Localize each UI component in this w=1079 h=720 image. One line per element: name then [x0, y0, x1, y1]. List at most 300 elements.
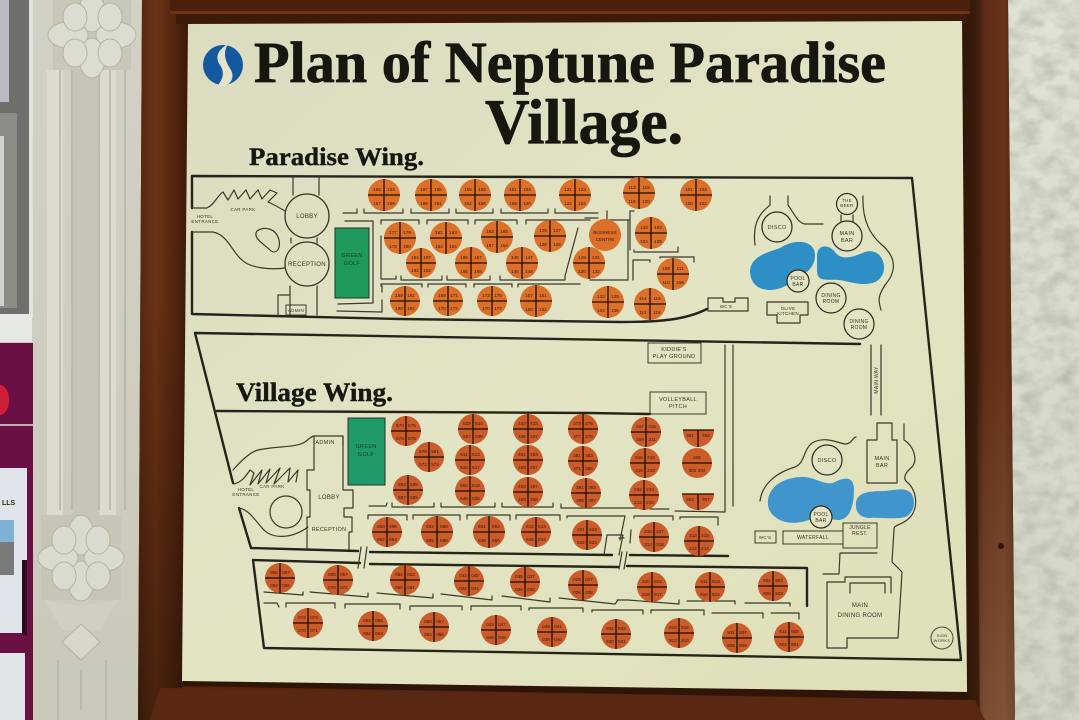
panel: Kiddie's playground and volleyball: [648, 343, 881, 512]
panel: Village Wing cottages: 052: [395, 572, 403, 577]
panel: Village Wing cottages: 309: [636, 437, 644, 442]
panel: Paradise Wing cottages: 112: [639, 310, 647, 315]
panel: Paradise green golf: GOLF: [344, 261, 360, 267]
paths around pools: [760, 424, 916, 638]
paths around pools: [754, 196, 893, 310]
panel: Village Wing cottages: 589: [410, 495, 418, 500]
panel: Village Wing cottages: 393: [588, 485, 596, 490]
panel: Village Wing cottages: 922: [654, 579, 662, 584]
panel: Paradise Wing cottages: 187: [423, 255, 431, 260]
main bar: MAIN: [875, 456, 889, 462]
main dining room: DINING ROOM: [838, 613, 882, 619]
panel: Village Wing cottages: 621: [577, 527, 585, 532]
panel: Village Wing cottages: 572: [419, 462, 427, 467]
panel: Paradise Wing cottages: 103: [699, 187, 707, 192]
panel: Paradise Wing cottages: 105: [654, 239, 662, 244]
hotel entrance label: ENTRANCE: [232, 492, 260, 497]
the beer: THE: [842, 198, 852, 203]
panel: Paradise Wing cottages: 151: [464, 201, 472, 206]
panel: Village Wing cottages: 375: [585, 421, 593, 426]
panel: Paradise Wing cottages: 197: [420, 187, 428, 192]
panel: Village Wing cottages: 233: [646, 487, 654, 492]
panel: Village Wing cottages: 570: [396, 423, 404, 428]
panel: Village Wing cottages: 558: [472, 496, 480, 501]
panel: Village Wing cottages: 064: [375, 631, 383, 636]
panel: Paradise Wing cottages: 114: [639, 296, 647, 301]
panel: Village Wing cottages: [265, 414, 804, 653]
panel: Village Wing cottages: 043: [459, 573, 467, 578]
waterfall: [783, 531, 843, 544]
panel: Village Wing cottages: 612: [526, 524, 534, 529]
panel: Village Wing amenities: [755, 423, 953, 649]
panel: Village Wing cottages: 650: [492, 538, 500, 543]
panel: Village Wing cottages: 574: [431, 462, 439, 467]
panel: site boundary lines: [192, 176, 961, 660]
panel: Village Wing cottages: 371: [573, 466, 581, 471]
panel: Paradise Wing cottages: 161: [435, 230, 443, 235]
panel: Paradise Wing cottages: 151: [509, 187, 517, 192]
panel: Village Wing cottages: 051: [407, 585, 415, 590]
panel: Village Wing cottages: 649: [478, 538, 486, 543]
panel: Village Wing cottages: 920: [642, 579, 650, 584]
panel: Village Wing cottages: 316: [635, 468, 643, 473]
panel: Village Wing cottages: 903: [779, 642, 787, 647]
hotel entrance label: HOTEL: [197, 214, 213, 219]
panel: Village Wing cottages: 040: [554, 637, 562, 642]
panel: Paradise Wing cottages: 100: [685, 201, 693, 206]
disco: DISCO: [768, 225, 787, 231]
panel: Paradise Wing cottages: 180: [403, 244, 411, 249]
panel: Village Wing cottages: 509: [463, 421, 471, 426]
stamp: SIGN: [937, 633, 947, 638]
panel: Village Wing cottages: 054: [424, 632, 432, 637]
panel: Village Wing cottages: 902: [775, 591, 783, 596]
panel: magenta notice board bottom left: [0, 343, 38, 720]
dining room: [816, 283, 846, 313]
panel: Paradise Wing cottages: 164: [500, 243, 508, 248]
panel: Paradise Wing cottages: 146: [511, 269, 519, 274]
panel: Paradise Wing cottages: 110: [662, 280, 670, 285]
panel: Paradise Wing cottages: 101: [685, 187, 693, 192]
reception label: RECEPTION: [312, 527, 346, 533]
panel: Paradise Wing cottages: 122: [564, 201, 572, 206]
panel: Paradise Wing cottages: 120: [642, 199, 650, 204]
panel: Paradise Wing cottages: 198: [420, 201, 428, 206]
panel: Village Wing cottages: 050: [395, 585, 403, 590]
panel: Village Wing cottages: 057: [282, 570, 290, 575]
panel: Paradise Wing cottages: 124: [578, 201, 586, 206]
heading: Paradise Wing: Paradise Wing.: [249, 144, 424, 171]
panel: Village Wing cottages: 508: [475, 434, 483, 439]
panel: Paradise Wing cottages: 155: [373, 187, 381, 192]
panel: Paradise Wing cottages: 167: [486, 243, 494, 248]
left pool: [750, 242, 815, 290]
panel: Village Wing cottages: 574: [396, 436, 404, 441]
panel: Village Wing cottages: 062: [363, 631, 371, 636]
panel: Village Wing cottages: 507: [463, 434, 471, 439]
panel: Paradise Wing cottages: 177: [389, 230, 397, 235]
heading: Village Wing: Village Wing.: [236, 378, 393, 407]
panel: Village Wing cottages: 025: [573, 577, 581, 582]
panel: Paradise Wing cottages: 133: [597, 294, 605, 299]
lobby: LOBBY: [296, 214, 318, 220]
panel: Village Wing cottages: 688: [440, 524, 448, 529]
title: Village.: [485, 86, 683, 157]
panel: Village Wing cottages: 213: [634, 500, 642, 505]
panel: Village Wing cottages: 587: [398, 495, 406, 500]
stamp: [931, 627, 953, 649]
panel: Paradise Wing cottages: 147: [525, 255, 533, 260]
icon: top rosette: [48, 0, 136, 78]
panel: grey notice board top left: [0, 0, 34, 342]
half-circle cottage top: 301: [686, 433, 694, 438]
panel: Village Wing cottages: 042: [459, 586, 467, 591]
panel: Paradise Wing cottages: 153: [387, 187, 395, 192]
panel: Village Wing cottages: 583: [398, 482, 406, 487]
panel: Village Wing cottages: 385: [585, 466, 593, 471]
panel: Village Wing cottages: 056: [282, 583, 290, 588]
panel: Village Wing cottages: 232: [634, 487, 642, 492]
panel: Paradise Wing cottages: 102: [699, 201, 707, 206]
panel: Village Wing cottages: 692: [377, 537, 385, 542]
panel: Village Wing cottages: 397: [588, 498, 596, 503]
olive kitchen: KITCHEN: [777, 311, 799, 316]
panel: Village Wing cottages: 213: [689, 533, 697, 538]
panel: Village Wing cottages: 445: [518, 434, 526, 439]
panel: Village Wing cottages: 624: [589, 540, 597, 545]
panel: Village Wing cottages: 038: [542, 637, 550, 642]
panel: Village Wing cottages: 046: [498, 635, 506, 640]
disco: [812, 445, 842, 475]
panel: Village Wing cottages: 036: [515, 587, 523, 592]
panel: Paradise Wing cottages: 128: [553, 242, 561, 247]
kiddies play ground: KIDDIE'S: [661, 347, 687, 353]
panel: Paradise Wing cottages: 172: [494, 306, 502, 311]
panel: Village Wing cottages: 932: [606, 626, 614, 631]
kiddies play ground: [648, 343, 701, 363]
panel: Paradise Wing cottages: 165: [460, 255, 468, 260]
panel: Village Wing cottages: 578: [408, 436, 416, 441]
panel: Village Wing cottages: 039: [542, 624, 550, 629]
panel: Village Wing cottages: 047: [498, 622, 506, 627]
panel: Paradise Wing cottages: 179: [403, 230, 411, 235]
panel: Paradise Wing cottages: 190: [395, 306, 403, 311]
panel: Village Wing cottages: 318: [656, 542, 664, 547]
panel: Village Wing cottages: 457: [530, 465, 538, 470]
panel: Village Wing cottages: 930: [606, 639, 614, 644]
panel: Village Wing cottages: 918: [642, 592, 650, 597]
panel: Paradise Wing entrance and lobby: [191, 176, 329, 315]
icon: lower rosette: [38, 515, 124, 720]
panel: Village Wing cottages: 696: [389, 524, 397, 529]
panel: Village Wing cottages: 907: [739, 630, 747, 635]
panel: Village green golf: [348, 418, 385, 485]
panel: Village green golf: GOLF: [358, 452, 374, 458]
panel: Paradise Wing cottages: 132: [592, 269, 600, 274]
main bar: MAIN: [840, 231, 854, 237]
main bar: [867, 423, 897, 483]
panel: Paradise green golf: GREEN: [341, 253, 363, 259]
panel: Village Wing cottages: 071: [310, 628, 318, 633]
panel: Paradise Wing cottages: 108: [676, 280, 684, 285]
panel: Paradise Wing cottages: 104: [640, 239, 648, 244]
panel: Paradise Wing cottages: 159: [387, 201, 395, 206]
panel: Village Wing cottages: 057: [436, 619, 444, 624]
panel: Village Wing cottages: 513: [472, 452, 480, 457]
reception: RECEPTION: [288, 262, 326, 268]
panel: Paradise Wing cottages: 184: [423, 268, 431, 273]
disco: [762, 212, 792, 242]
panel: sign board: [182, 21, 967, 692]
olive kitchen: OLIVE: [781, 306, 795, 311]
panel: Village Wing cottages: 317: [636, 424, 644, 429]
panel: Village Wing cottages: 212: [689, 546, 697, 551]
panel: Paradise Wing cottages: 118: [628, 199, 636, 204]
panel: Village Wing cottages: 585: [410, 482, 418, 487]
half-circle cottage bottom: 307: [702, 497, 710, 502]
panel: Paradise Wing cottages: 172: [450, 306, 458, 311]
panel: Village Wing cottages: 054: [270, 583, 278, 588]
panel: Paradise Wing cottages: 157: [373, 201, 381, 206]
right pool: [856, 489, 914, 518]
panel: Village Wing cottages: 451: [518, 452, 526, 457]
panel: Village Wing cottages: 623: [589, 527, 597, 532]
panel: Village Wing cottages: 911: [700, 579, 708, 584]
panel: Paradise Wing cottages: 145: [511, 255, 519, 260]
panel: Paradise Wing cottages: 103: [640, 225, 648, 230]
panel: Paradise Wing cottages: 166: [460, 269, 468, 274]
panel: Village Wing cottages: 319: [635, 455, 643, 460]
panel: Village Wing cottages: 437: [530, 434, 538, 439]
WCs: [708, 298, 748, 311]
panel: Paradise Wing cottages: 125: [539, 228, 547, 233]
panel: Village Wing cottages: 315: [648, 424, 656, 429]
panel: Paradise Wing amenities: [708, 194, 893, 339]
olive kitchen: [767, 302, 808, 323]
panel: Village Wing cottages: 215: [701, 533, 709, 538]
panel: Village Wing cottages: 055: [270, 570, 278, 575]
panel: Village Wing cottages: 214: [701, 546, 709, 551]
panel: Paradise Wing cottages: 140: [523, 201, 531, 206]
panel: Paradise Wing walkways: [337, 209, 694, 312]
panel: Village Wing cottages: 913: [681, 638, 689, 643]
panel: Village Wing cottages: 648: [526, 537, 534, 542]
panel: Village Wing cottages: 458: [530, 497, 538, 502]
panel: Paradise Wing cottages: 131: [592, 255, 600, 260]
volleyball pitch: VOLLEYBALL: [659, 397, 697, 403]
panel: Paradise Wing cottages: 159: [509, 201, 517, 206]
panel: Paradise Wing cottages: 127: [553, 228, 561, 233]
panel: Village Wing cottages: 455: [518, 465, 526, 470]
panel: Village Wing cottages: 457: [530, 484, 538, 489]
panel: Paradise Wing cottages: 167: [474, 255, 482, 260]
panel: Village green golf: GREEN: [355, 444, 377, 450]
panel: Paradise Wing cottages: 115: [653, 296, 661, 301]
panel: Village Wing cottages: 315: [644, 529, 652, 534]
panel: Village Wing cottages: 622: [577, 540, 585, 545]
panel: Paradise Wing cottages: 161: [434, 201, 442, 206]
main bar: [832, 221, 862, 251]
panel: Paradise Wing cottages: 155: [464, 187, 472, 192]
panel: Village Wing cottages: 311: [648, 437, 656, 442]
panel: Village Wing cottages: 302 304: [689, 468, 706, 473]
panel: Village Wing cottages: 933: [618, 626, 626, 631]
dining room: ROOM: [823, 299, 839, 305]
panel: Village Wing cottages: 065: [328, 572, 336, 577]
panel: Paradise Wing cottages: 156: [478, 201, 486, 206]
lobby label: LOBBY: [318, 495, 340, 501]
panel: Village Wing cottages: 518: [472, 483, 480, 488]
panel: Paradise Wing cottages: 111: [677, 266, 684, 271]
panel: Village Wing cottages: 694: [389, 537, 397, 542]
hotel entrance label: ENTRANCE: [191, 219, 219, 224]
panel: Village Wing cottages: 381: [573, 453, 581, 458]
panel: Village Wing cottages: 433: [530, 421, 538, 426]
half-circle cottage top: [683, 430, 714, 447]
volleyball pitch: PITCH: [669, 404, 687, 410]
panel: Paradise Wing cottages: 182: [411, 268, 419, 273]
panel: Paradise Wing cottages: 195: [478, 187, 486, 192]
main bar: BAR: [841, 238, 853, 244]
panel: Paradise Wing cottages: 191: [407, 293, 415, 298]
title: [254, 30, 886, 157]
panel: Village Wing cottages: 072: [340, 585, 348, 590]
panel: Village Wing cottages: 914: [669, 625, 677, 630]
panel: Village Wing cottages: 912: [669, 638, 677, 643]
main dining room: [823, 553, 898, 648]
panel: Village Wing cottages: 465: [518, 497, 526, 502]
panel: Village Wing cottages: 043: [486, 622, 494, 627]
panel: Village Wing cottages: 395: [576, 498, 584, 503]
panel: Village Wing cottages: 514: [475, 421, 483, 426]
half-circle cottage bottom: 304: [686, 497, 694, 502]
panel: Village Wing cottages: 072: [298, 615, 306, 620]
panel: Village Wing cottages: 053: [407, 572, 415, 577]
panel: Village Wing cottages: 218: [647, 455, 655, 460]
panel: Village Wing cottages: 453: [518, 484, 526, 489]
panel: Paradise Wing cottages: 170: [438, 306, 446, 311]
the beer: [836, 194, 858, 214]
hotel entrance label: HOTEL: [238, 487, 254, 492]
panel: Village Wing cottages: 056: [436, 632, 444, 637]
panel: Paradise Wing cottages: 181: [411, 255, 419, 260]
panel: Village Wing cottages: 038: [527, 587, 535, 592]
panel: Village Wing cottages: 912: [712, 592, 720, 597]
panel: Village Wing cottages: 379: [585, 434, 593, 439]
pool bar: [787, 270, 809, 292]
panel: Paradise Wing cottages: 152: [539, 307, 547, 312]
panel: Village Wing cottages: 028: [585, 590, 593, 595]
panel: Village Wing cottages: 517: [472, 465, 480, 470]
WCs: [755, 531, 776, 543]
panel: Village Wing cottages: 911: [779, 629, 787, 634]
WCs: WC'S: [759, 535, 771, 540]
panel: magenta notice board bottom left: LLS: [2, 500, 16, 507]
panel: Paradise green golf: [335, 228, 369, 298]
panel: Village Wing cottages: 534: [538, 537, 546, 542]
half-circle cottage top: 303: [702, 433, 710, 438]
panel: Village Wing cottages: 909: [739, 643, 747, 648]
panel: Village Wing cottages: 041: [471, 586, 479, 591]
panel: Paradise Wing cottages: 171: [450, 293, 458, 298]
right pool: [817, 246, 884, 284]
WCs: WC'S: [720, 304, 732, 309]
panel: Paradise Wing cottages: 136: [611, 308, 619, 313]
panel: Village Wing cottages: 685: [426, 538, 434, 543]
panel: Village Wing cottages: 917: [654, 592, 662, 597]
jungle rest: JUNGLE: [849, 525, 871, 531]
panel: Paradise Wing cottages: 116: [653, 310, 661, 315]
panel: Village Wing cottages: 690: [377, 524, 385, 529]
panel: Paradise Wing cottages: 134: [597, 308, 605, 313]
panel: Paradise Wing cottages: BUSINESS: [593, 230, 617, 235]
panel: Village Wing cottages: 901: [791, 642, 799, 647]
panel: Paradise Wing cottages: 150: [525, 307, 533, 312]
disco: DISCO: [818, 458, 837, 464]
panel: Village Wing cottages: 552: [460, 483, 468, 488]
dining room: DINING: [821, 293, 841, 299]
panel: Village Wing cottages: 027: [585, 577, 593, 582]
panel: Village Wing cottages: 545: [460, 496, 468, 501]
panel: Paradise Wing cottages: 170: [482, 306, 490, 311]
panel: Village Wing cottages: 317: [656, 529, 664, 534]
panel: Village Wing cottages: 035: [515, 574, 523, 579]
panel: Paradise Wing cottages: 151: [539, 293, 547, 298]
panel: Village Wing cottages: 908: [727, 643, 735, 648]
panel: Paradise Wing cottages: 165: [500, 229, 508, 234]
main way: MAIN WAY: [874, 366, 880, 394]
panel: Village Wing cottages: 070: [328, 585, 336, 590]
dining room 2: DINING: [849, 319, 869, 325]
panel: Paradise Wing cottages: 169: [438, 293, 446, 298]
panel: Village Wing cottages: 910: [700, 592, 708, 597]
panel: Paradise Wing cottages: 189: [395, 293, 403, 298]
panel: Village Wing cottages: 219: [646, 500, 654, 505]
panel: Paradise Wing cottages: 178: [389, 244, 397, 249]
panel: Village Wing cottages: 065: [375, 618, 383, 623]
panel: Village Wing cottages: 911: [727, 630, 735, 635]
panel: Village Wing cottages: 073: [310, 615, 318, 620]
panel: Village Wing cottages: 305: [693, 455, 701, 460]
title: Plan of Neptune Paradise: [254, 30, 886, 95]
panel: Village Wing cottages: 903: [775, 578, 783, 583]
panel: Paradise Wing cottages: 121: [564, 187, 572, 192]
panel: Village Wing cottages: 037: [527, 574, 535, 579]
panel: Paradise Wing cottages: 109: [662, 266, 670, 271]
panel: Village Wing cottages: 651: [478, 524, 486, 529]
panel: Village Wing cottages: 515: [460, 465, 468, 470]
admin label: ADMIN: [315, 440, 335, 446]
panel: Paradise Wing cottages: 192: [407, 306, 415, 311]
panel: Paradise Wing cottages: 130: [578, 269, 586, 274]
main way: [871, 345, 881, 415]
panel: Village Wing cottages: 905: [791, 629, 799, 634]
panel: Village Wing cottages: 581: [431, 449, 439, 454]
kiddies play ground: PLAY GROUND: [653, 354, 695, 360]
left pool: [768, 477, 854, 523]
main dining room: MAIN: [852, 603, 868, 609]
panel: Paradise Wing cottages: 102: [654, 225, 662, 230]
icon: blue logo: [203, 44, 243, 86]
panel: Village Wing cottages: 048: [486, 635, 494, 640]
panel: Village Wing cottages: 686: [440, 538, 448, 543]
panel: Village Wing cottages: 511: [460, 452, 468, 457]
panel: Village Wing cottages: 900: [763, 591, 771, 596]
panel: Village Wing cottages: 652: [492, 524, 500, 529]
panel: Paradise Wing cottages: 157: [525, 293, 533, 298]
panel: Village Wing cottages: 443: [518, 421, 526, 426]
pool bar: BAR: [815, 518, 827, 524]
